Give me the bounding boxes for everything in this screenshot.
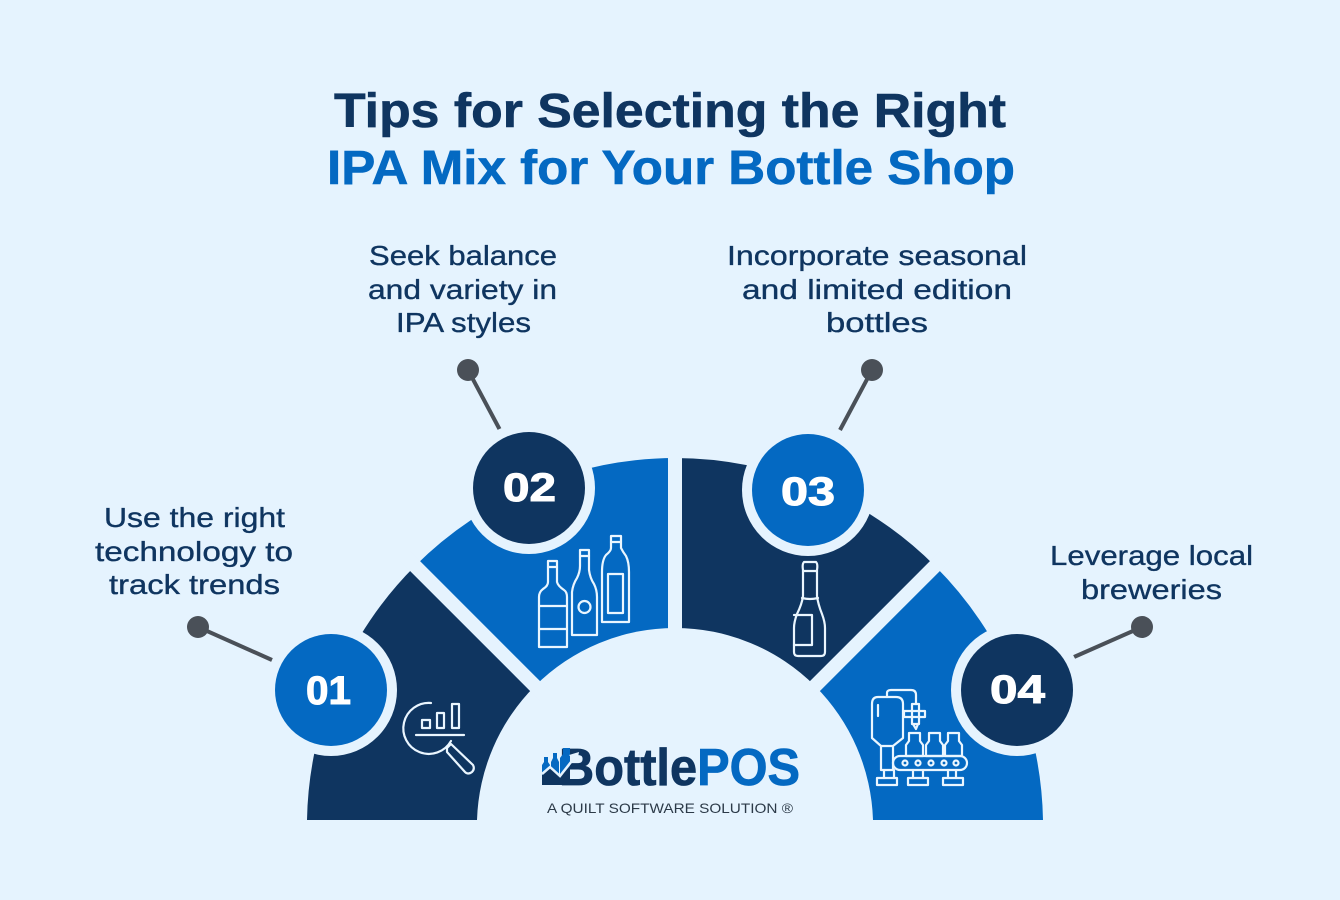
wordmark: BottlePOS xyxy=(559,739,800,797)
text: tip 2 xyxy=(368,240,557,338)
text: tip 2: Seek balance xyxy=(369,240,557,271)
connector pin 4 xyxy=(1074,616,1153,657)
badge 03: 03 xyxy=(781,470,835,514)
tagline: A QUILT SOFTWARE SOLUTION ® xyxy=(547,800,794,816)
text: tip 1: Use the right xyxy=(104,502,285,533)
text: tip 4 xyxy=(1050,540,1253,605)
text: tip 4: breweries xyxy=(1081,574,1222,605)
logo xyxy=(542,739,800,816)
text: tip 3: bottles xyxy=(826,307,928,338)
connector pin 1 xyxy=(187,616,272,660)
text: tip 1: technology to xyxy=(95,536,293,567)
connector pin 3 xyxy=(840,359,883,430)
text: tip 4: Leverage local xyxy=(1050,540,1253,571)
badge 01 xyxy=(265,624,397,756)
icon: single bottle xyxy=(794,562,825,656)
connector pin 2 xyxy=(457,359,500,430)
segment 1 xyxy=(307,566,535,820)
icon: logo bottles xyxy=(542,748,579,785)
text: tip 2: IPA styles xyxy=(396,307,531,338)
segment 2 xyxy=(415,458,675,686)
icon: bottling machine xyxy=(872,690,967,785)
segment 4 xyxy=(815,566,1043,820)
badge 01: 01 xyxy=(306,669,351,713)
segment 3 xyxy=(675,458,935,686)
badge 04: 04 xyxy=(990,668,1046,712)
text: tip 1 xyxy=(95,502,293,600)
badge 02: 02 xyxy=(503,466,556,510)
badge 02 xyxy=(463,422,595,554)
icon: three bottles xyxy=(539,536,629,647)
text: tip 3: Incorporate seasonal xyxy=(727,240,1027,271)
text: tip 1: track trends xyxy=(109,569,280,600)
badge 04 xyxy=(951,624,1083,756)
text: tip 3 xyxy=(727,240,1027,338)
title: IPA Mix for Your Bottle Shop xyxy=(327,142,1015,195)
title: Tips for Selecting the Right xyxy=(334,85,1006,138)
title xyxy=(327,85,1015,195)
text: tip 2: and variety in xyxy=(368,274,557,305)
icon: magnifier with bar chart xyxy=(403,703,474,774)
badge 03 xyxy=(742,424,874,556)
semicircle chart xyxy=(307,450,1043,820)
text: tip 3: and limited edition xyxy=(742,274,1012,305)
